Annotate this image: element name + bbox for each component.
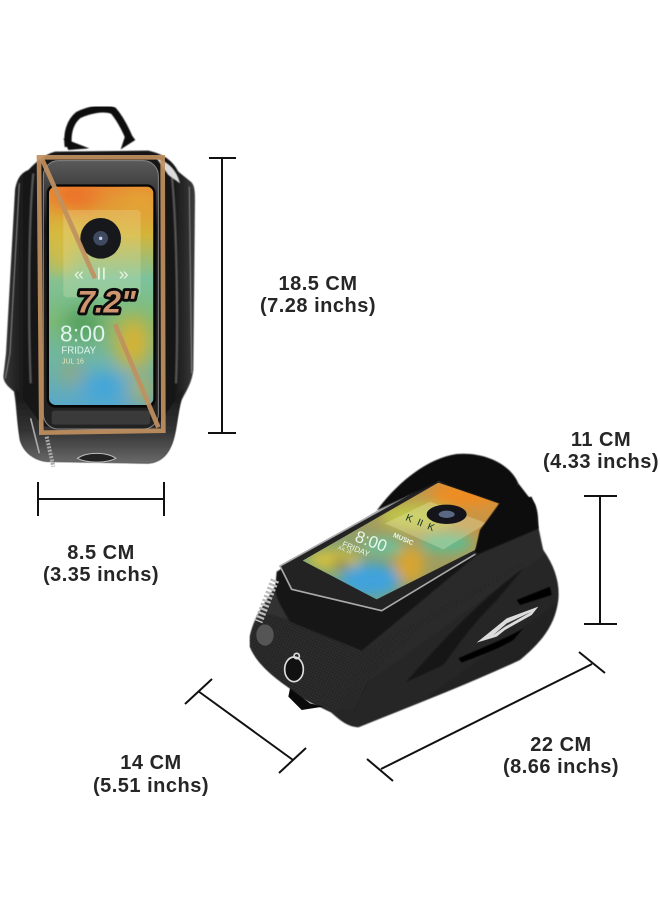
- screen text: MUSIC: [392, 532, 414, 547]
- hood side: [475, 483, 538, 555]
- icon: bag handle: [63, 109, 135, 150]
- side highlights: [5, 173, 192, 383]
- clock text: FRIDAY: [61, 345, 97, 356]
- clock text: 8:00: [60, 320, 105, 346]
- clock text: [60, 320, 105, 365]
- screen text: FRIDAY: [341, 540, 372, 559]
- top highlight: [157, 158, 180, 183]
- dimension: height 18.5 cm: [208, 158, 376, 433]
- front view of bag: [3, 109, 195, 467]
- window panel: [43, 161, 158, 429]
- side vents: [407, 568, 552, 682]
- bottom strap: [288, 688, 323, 710]
- player controls: K II K: [404, 513, 436, 534]
- phone screen: [302, 482, 500, 600]
- phone screen: [48, 185, 157, 405]
- screen text: JUL 16: [337, 545, 353, 555]
- icon: bottom buckle: [77, 453, 116, 462]
- top compartment: [275, 498, 538, 651]
- bottom sheen: [52, 411, 150, 425]
- bag shell: [250, 503, 559, 727]
- size label 7.2 inch: 7.2": [77, 285, 137, 320]
- brand logo arrow: [477, 607, 538, 643]
- dimension: height 11 cm: 11 CM: [571, 429, 631, 451]
- textured front panel: [250, 613, 362, 712]
- music card: [385, 502, 487, 549]
- dimension: width 8.5 cm: (3.35 inchs): [43, 564, 159, 586]
- dimension: length 22 cm: 22 CM: [530, 734, 592, 756]
- dimension: height 11 cm: (4.33 inchs): [543, 451, 659, 473]
- dimension: height 11 cm: [543, 429, 659, 624]
- player controls: « II »: [74, 263, 129, 283]
- dimension: height 18.5 cm: (7.28 inchs): [260, 295, 376, 317]
- screen text: [337, 527, 414, 559]
- dimension: height 18.5 cm: 18.5 CM: [278, 273, 358, 295]
- infographic canvas: [2, 106, 658, 796]
- bag lower panel: [16, 390, 183, 463]
- clock text: JUL 16: [62, 358, 84, 365]
- perspective view of bag: [250, 454, 559, 727]
- dimension: depth 14 cm: 14 CM: [120, 752, 182, 774]
- orange size frame: [39, 157, 163, 433]
- dimension: width 8.5 cm: 8.5 CM: [67, 542, 135, 564]
- icon: album disc: [80, 218, 121, 259]
- screen window: [280, 480, 507, 611]
- icon: zipper pull: [31, 418, 53, 467]
- screen frame: [47, 184, 156, 408]
- bag body: [3, 151, 195, 463]
- textured shoulder: [342, 563, 523, 710]
- icon: cable port: [285, 653, 303, 682]
- screen text: 8:00: [353, 527, 390, 556]
- sun hood: [377, 454, 537, 552]
- music card: [63, 210, 141, 297]
- dimension: depth 14 cm: (5.51 inchs): [93, 775, 209, 797]
- icon: zipper pull: [256, 580, 275, 646]
- icon: album disc: [427, 505, 467, 524]
- dimension: length 22 cm: (8.66 inchs): [503, 756, 619, 778]
- dimension: width 8.5 cm: [38, 482, 164, 586]
- dimension: length 22 cm: [367, 652, 619, 781]
- dimension: depth 14 cm: [93, 679, 306, 797]
